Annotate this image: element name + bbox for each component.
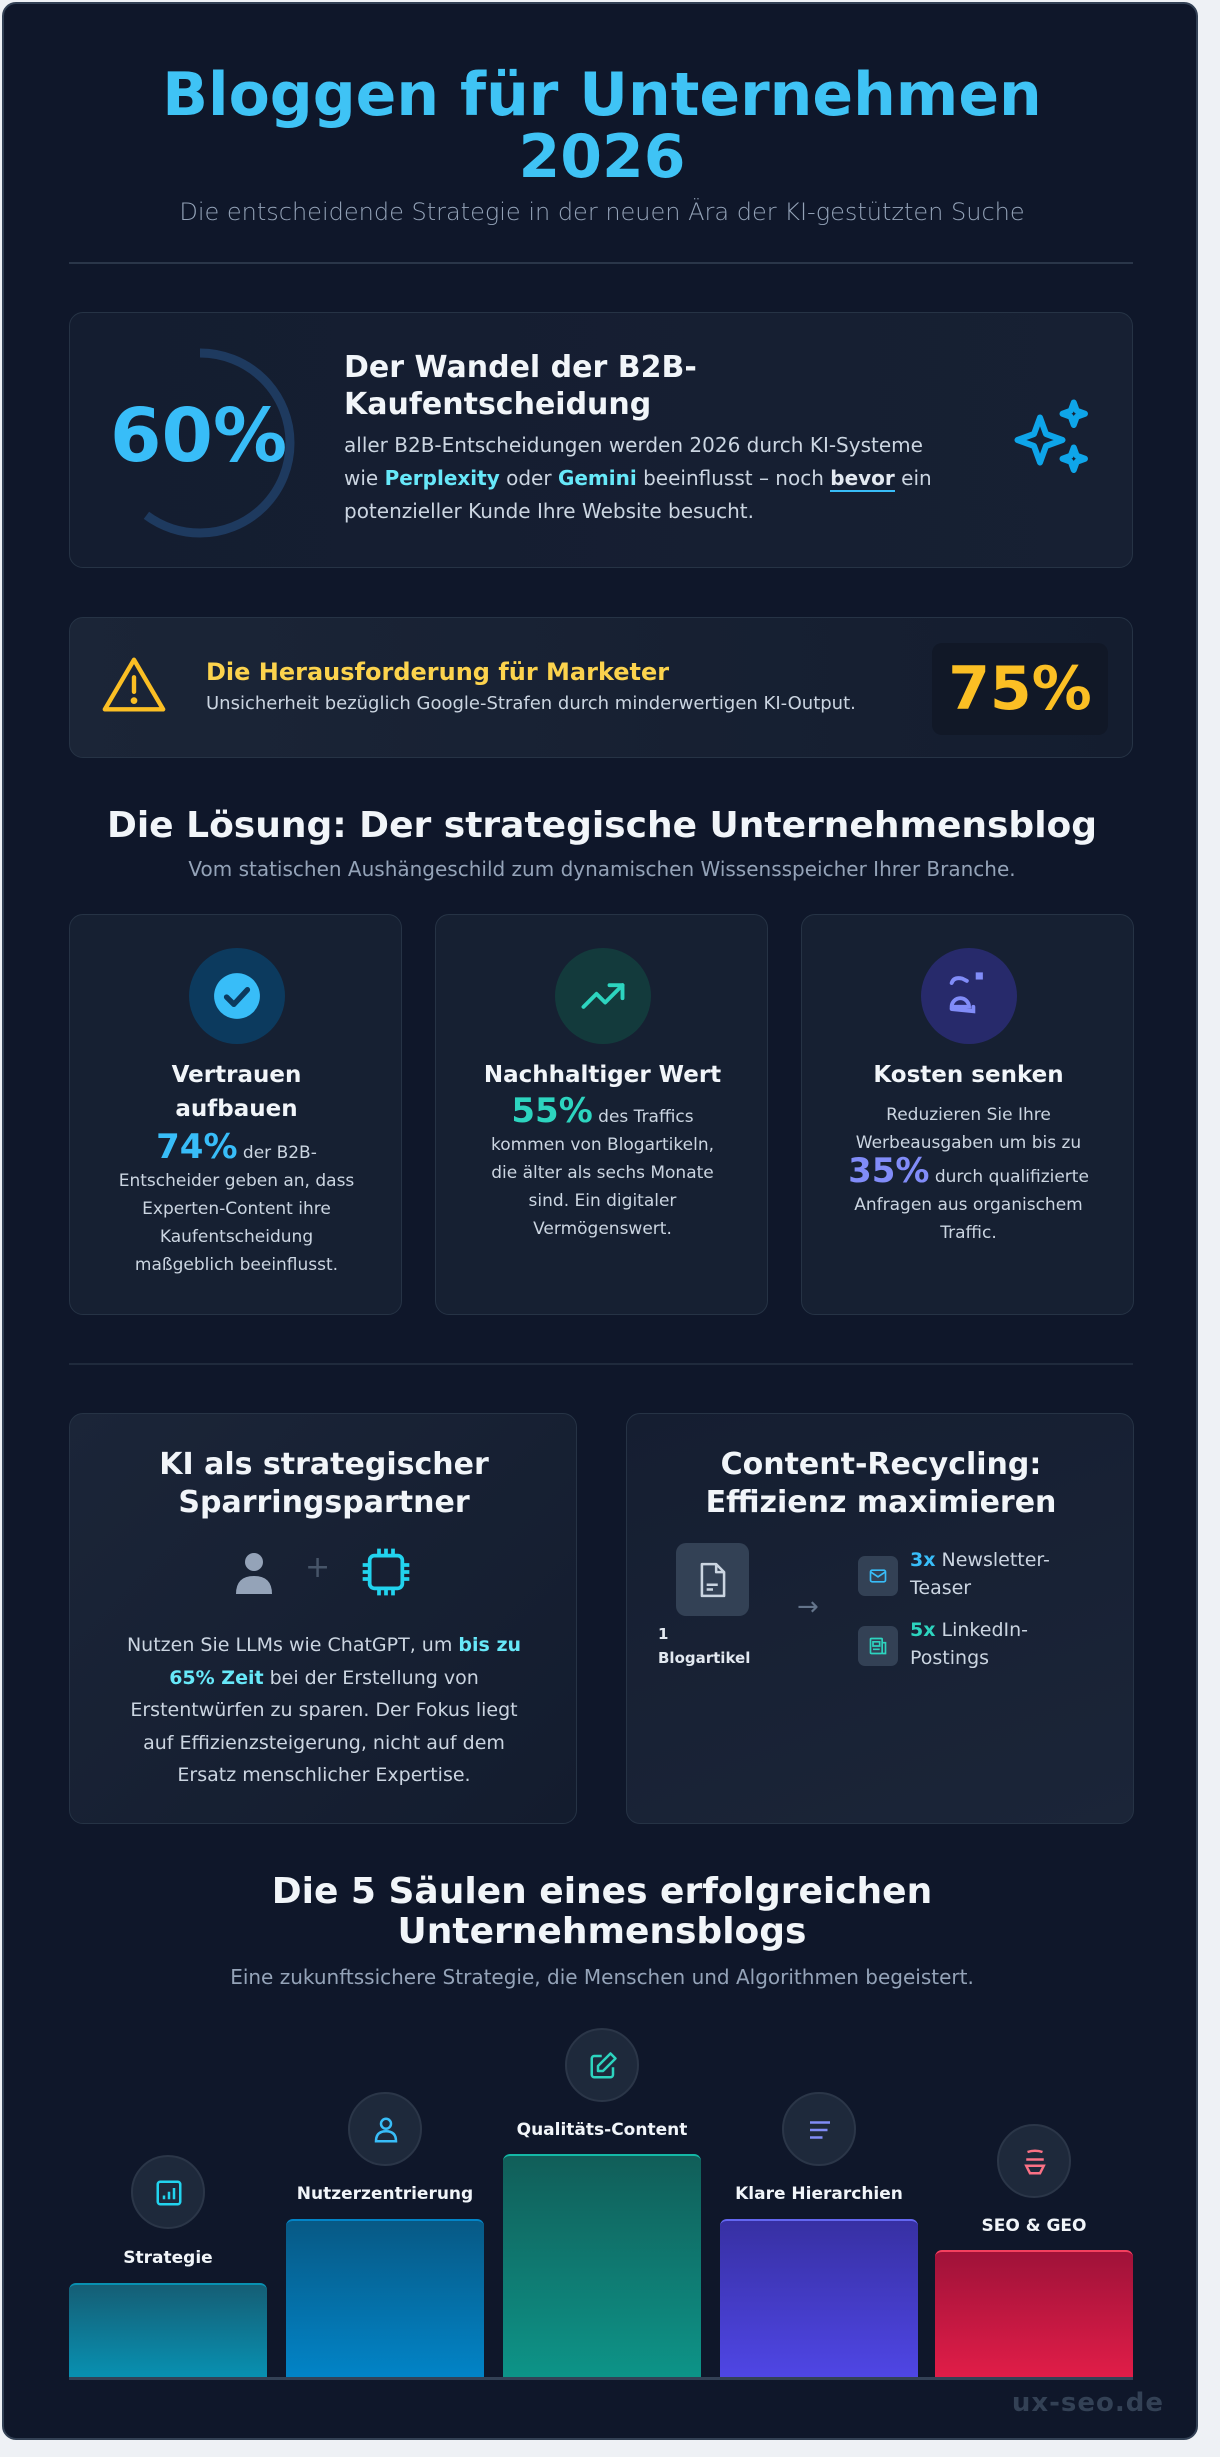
icon: trend — [555, 948, 651, 1044]
heading — [172, 1062, 301, 1122]
heading: Effizienz maximieren — [706, 1485, 1056, 1520]
text: 55% des Traffics kommen von Blogartikeln, die älter als sechs Monate sind. Ein digitaler Vermögenswert. — [491, 1091, 714, 1239]
panel: Vertrauen — [69, 914, 402, 1315]
ring chart 60% — [144, 348, 294, 538]
icon: document — [676, 1543, 749, 1616]
text: Unsicherheit bezüglich Google-Strafen durch minderwertigen KI-Output. — [206, 693, 856, 714]
pillar: Strategie — [69, 2155, 267, 2377]
arrow: → — [797, 1592, 819, 1622]
heading: Kosten senken — [873, 1062, 1064, 1088]
heading: Der Wandel der B2B-Kaufentscheidung — [344, 350, 697, 422]
icon: person plus chip: + — [305, 1550, 330, 1585]
subtitle: Die entscheidende Strategie in der neuen Ära der KI-gestützten Suche — [179, 198, 1025, 226]
heading — [159, 1447, 489, 1520]
pillar: SEO & GEO — [935, 2124, 1133, 2377]
text: aller B2B-Entscheidungen werden 2026 durch KI-Systeme wie Perplexity oder Gemini beeinflusst – noch bevor ein potenzieller Kunde Ihre Website besucht. — [344, 433, 932, 523]
section heading: 5 Säulen: Die 5 Säulen eines erfolgreichen — [272, 1871, 932, 1912]
label: 1 Blogartikel: 1 — [658, 1625, 668, 1643]
title — [162, 60, 1042, 192]
heading: Sparringspartner — [178, 1485, 470, 1520]
item: newsletter — [858, 1549, 1050, 1599]
section subtitle: Eine zukunftssichere Strategie, die Menschen und Algorithmen begeistert. — [230, 1965, 974, 1989]
item: newsletter: Teaser — [910, 1577, 971, 1599]
section heading: 5 Säulen: Unternehmensblogs — [398, 1911, 806, 1952]
stat 60%: 60% — [110, 393, 287, 479]
text: Reduzieren Sie Ihre Werbeausgaben um bis zu 35% durch qualifizierte Anfragen aus organischem Traffic. — [848, 1105, 1089, 1243]
pillar: SEO & GEO: SEO & GEO — [982, 2216, 1086, 2236]
heading: Die Herausforderung für Marketer — [206, 658, 669, 686]
pillar: Nutzerzentrierung — [286, 2092, 484, 2377]
text: 74% der B2B-Entscheider geben an, dass Experten-Content ihre Kaufentscheidung maßgeblich beeinflusst. — [119, 1127, 354, 1275]
panel: Kosten senken — [801, 914, 1134, 1315]
heading: Vertrauen — [172, 1062, 301, 1088]
icon: piggy — [921, 948, 1017, 1044]
text: Nutzen Sie LLMs wie ChatGPT, um bis zu 65% Zeit bei der Erstellung von Erstentwürfen zu sparen. Der Fokus liegt auf Effizienzsteigerung, nicht auf dem Ersatz menschlicher Expertise. — [127, 1634, 521, 1786]
heading: Nachhaltiger Wert — [484, 1062, 721, 1088]
watermark: ux-seo.de — [1012, 2388, 1164, 2418]
section subtitle: Vom statischen Aushängeschild zum dynamischen Wissensspeicher Ihrer Branche. — [188, 857, 1016, 881]
heading: aufbauen — [175, 1096, 298, 1122]
pillar: Klare Hierarchien — [720, 2092, 918, 2377]
label: 1 Blogartikel: Blogartikel — [658, 1649, 750, 1667]
icon: check — [189, 948, 285, 1044]
stat 75% — [932, 643, 1108, 735]
panel: KI Sparringspartner — [69, 1413, 577, 1824]
chart: five pillars — [69, 2028, 1133, 2380]
icon: person plus chip — [236, 1548, 410, 1596]
panel: Content-Recycling — [626, 1413, 1134, 1824]
pillar: Qualitäts-Content — [503, 2028, 701, 2377]
icon: sparkles — [1014, 400, 1088, 473]
title: 2026 — [518, 122, 686, 192]
panel: B2B shift — [69, 312, 1133, 568]
section heading: 5 Säulen — [272, 1871, 932, 1952]
item: newsletter: 3x Newsletter- — [910, 1549, 1050, 1571]
panel: challenge — [69, 617, 1133, 758]
pillar: Klare Hierarchien: Klare Hierarchien — [735, 2184, 903, 2204]
heading — [706, 1447, 1056, 1520]
stat 75%: 75% — [948, 654, 1092, 724]
label: 1 Blogartikel — [658, 1625, 750, 1667]
item: linkedin — [858, 1619, 1028, 1669]
pillar: Qualitäts-Content: Qualitäts-Content — [517, 2120, 687, 2140]
item: linkedin: Postings — [910, 1647, 989, 1669]
section heading: Lösung: Die Lösung: Der strategische Unternehmensblog — [107, 805, 1097, 846]
heading: KI als strategischer — [159, 1447, 489, 1482]
title: Bloggen für Unternehmen — [162, 60, 1042, 130]
pillar: Strategie: Strategie — [123, 2248, 213, 2268]
heading: Content-Recycling: — [721, 1447, 1041, 1482]
icon: warning — [102, 658, 166, 712]
item: linkedin: 5x LinkedIn- — [910, 1619, 1028, 1641]
panel: Nachhaltiger Wert — [435, 914, 768, 1315]
pillar: Nutzerzentrierung: Nutzerzentrierung — [297, 2184, 473, 2204]
